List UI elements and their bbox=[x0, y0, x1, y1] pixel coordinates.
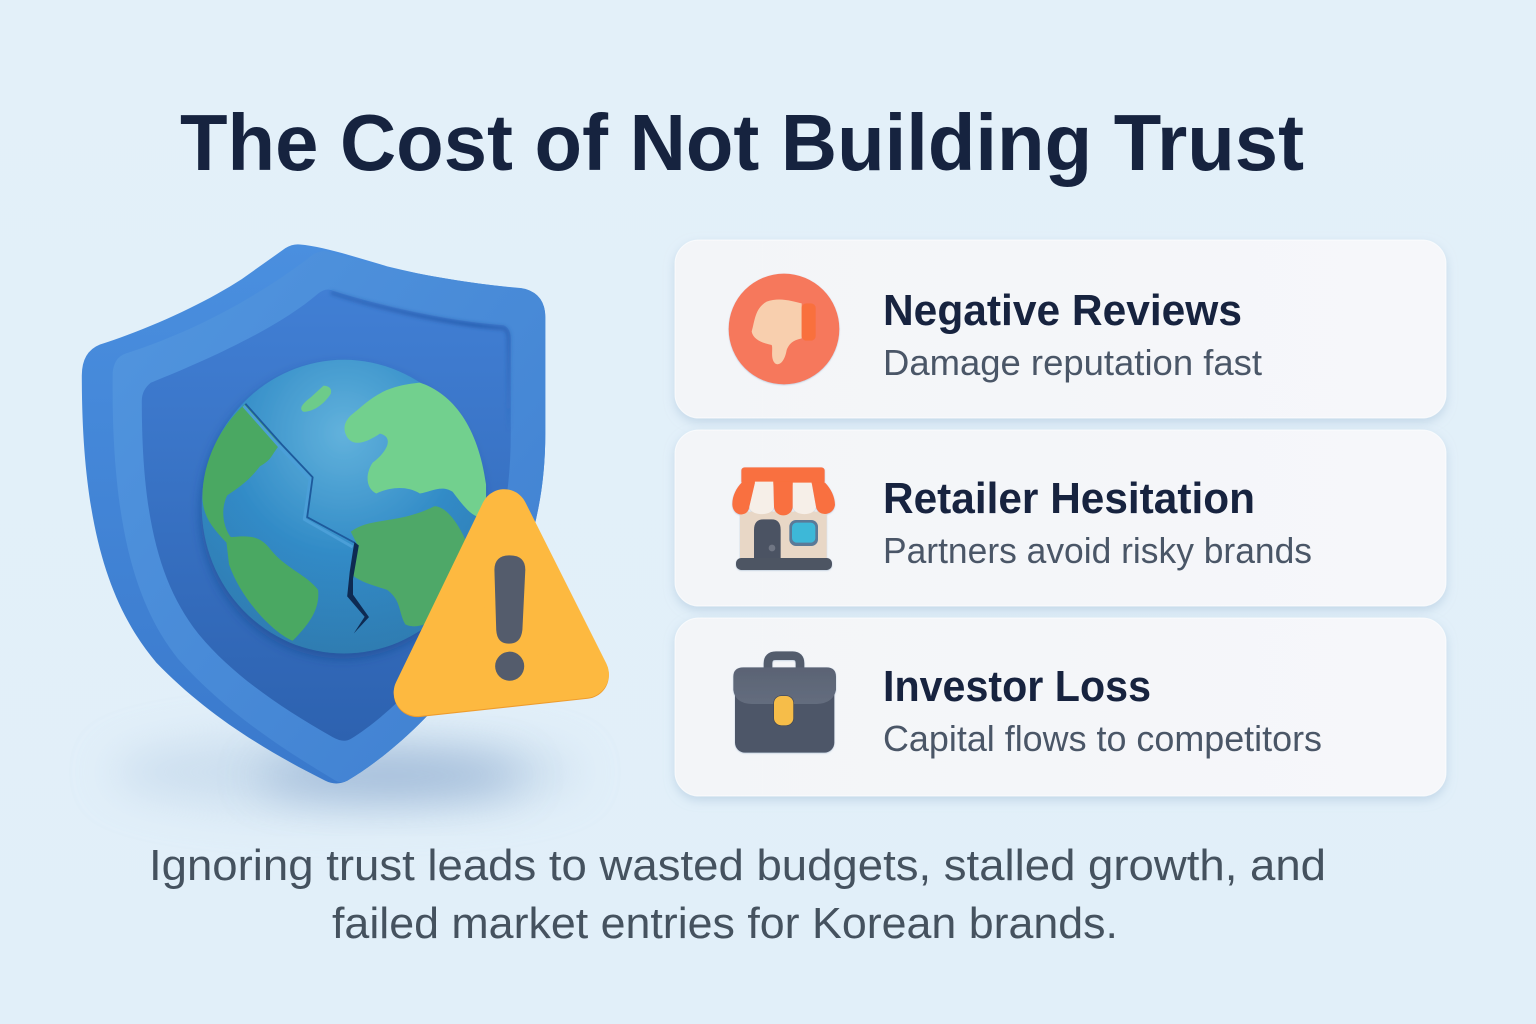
icon: briefcase bbox=[733, 656, 836, 753]
icon: storefront bbox=[732, 467, 835, 570]
card: negative reviews bbox=[675, 240, 1446, 418]
globe bbox=[202, 360, 486, 654]
shield ground shadow bbox=[110, 734, 580, 810]
text: damage reputation fast: Damage reputation fast bbox=[883, 342, 1262, 383]
warning triangle bbox=[417, 513, 585, 693]
closing statement bbox=[149, 841, 1326, 948]
closing statement: Ignoring trust leads to wasted budgets, stalled growth, and bbox=[149, 841, 1326, 890]
heading: retailer hesitation: Retailer Hesitation bbox=[883, 474, 1255, 523]
card: retailer hesitation bbox=[675, 430, 1446, 606]
title: The Cost of Not Building Trust bbox=[180, 98, 1304, 187]
illustration: cracked globe in shield with warning triangle bbox=[82, 244, 585, 810]
heading: negative reviews: Negative Reviews bbox=[883, 286, 1242, 335]
icon: thumbs down bbox=[729, 274, 839, 384]
heading: investor loss: Investor Loss bbox=[883, 662, 1151, 711]
card: investor loss bbox=[675, 618, 1446, 796]
text: capital flows to competitors: Capital flows to competitors bbox=[883, 718, 1322, 759]
closing statement: failed market entries for Korean brands. bbox=[332, 899, 1118, 948]
shield bbox=[82, 244, 545, 783]
text: partners avoid risky brands: Partners avoid risky brands bbox=[883, 530, 1312, 571]
